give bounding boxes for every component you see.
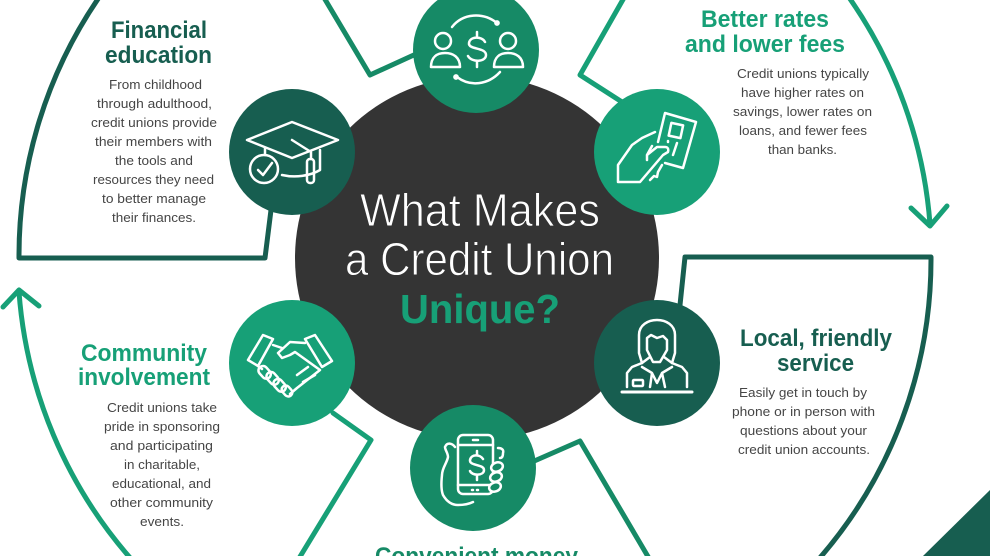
heading: involvement [78,364,210,391]
body text: loans, and fewer fees [739,123,868,138]
title line 1: What Makes [360,184,600,236]
icon: service representative [594,300,720,426]
body text: to better manage [102,191,206,206]
heading: Financial [111,17,207,44]
outline: local friendly service panel [680,257,931,556]
heading [685,6,845,58]
heading: education [105,42,212,69]
corner triangle [923,490,990,556]
body text: educational, and [112,476,211,491]
body text [732,385,875,457]
icon: handshake [229,300,355,426]
heading [78,340,210,391]
outline: convenient money connector [532,441,650,556]
body text: phone or in person with [732,404,875,419]
body text [104,400,220,529]
center circle with title [295,76,659,440]
heading [740,325,893,377]
arrow: better rates arc [580,0,947,226]
body text: resources they need [93,172,214,187]
body text: other community [110,495,214,510]
body text: Easily get in touch by [739,385,868,400]
body text: From childhood [109,77,202,92]
panel text: financial education [91,17,217,225]
body text: the tools and [115,153,193,168]
body text: have higher rates on [741,85,864,100]
title line 2: a Credit Union [345,233,614,285]
body text: and participating [110,438,213,453]
body text: in charitable, [124,457,200,472]
outline: financial education panel [19,0,271,258]
body text: events. [140,514,184,529]
body text: their finances. [112,210,196,225]
body text: pride in sponsoring [104,419,220,434]
outline: top connector [323,0,416,75]
body text: credit union accounts. [738,442,870,457]
body text: Credit unions typically [737,66,870,81]
body text: savings, lower rates on [733,104,872,119]
panel text: better rates and lower fees [685,6,872,157]
arrow: community involvement arc [3,290,371,556]
body text: through adulthood, [97,96,212,111]
icon: graduation cap [229,89,355,215]
body text: than banks. [768,142,837,157]
heading: Community [81,340,208,367]
panel text: local friendly service [732,325,893,457]
icon: people and dollar [413,0,539,113]
body text: Credit unions take [107,400,217,415]
panel text: community involvement [78,340,220,529]
heading [105,17,212,69]
body text: credit unions provide [91,115,217,130]
body text [91,77,217,225]
heading: service [777,350,854,377]
heading: Local, friendly [740,325,893,352]
body text [733,66,872,157]
body text: their members with [95,134,212,149]
title line 3: Unique? [400,286,560,332]
icon: hand with card [594,89,720,215]
icon: phone in hand [410,405,536,531]
body text: questions about your [740,423,868,438]
heading: Better rates [701,6,829,33]
heading: and lower fees [685,31,845,58]
